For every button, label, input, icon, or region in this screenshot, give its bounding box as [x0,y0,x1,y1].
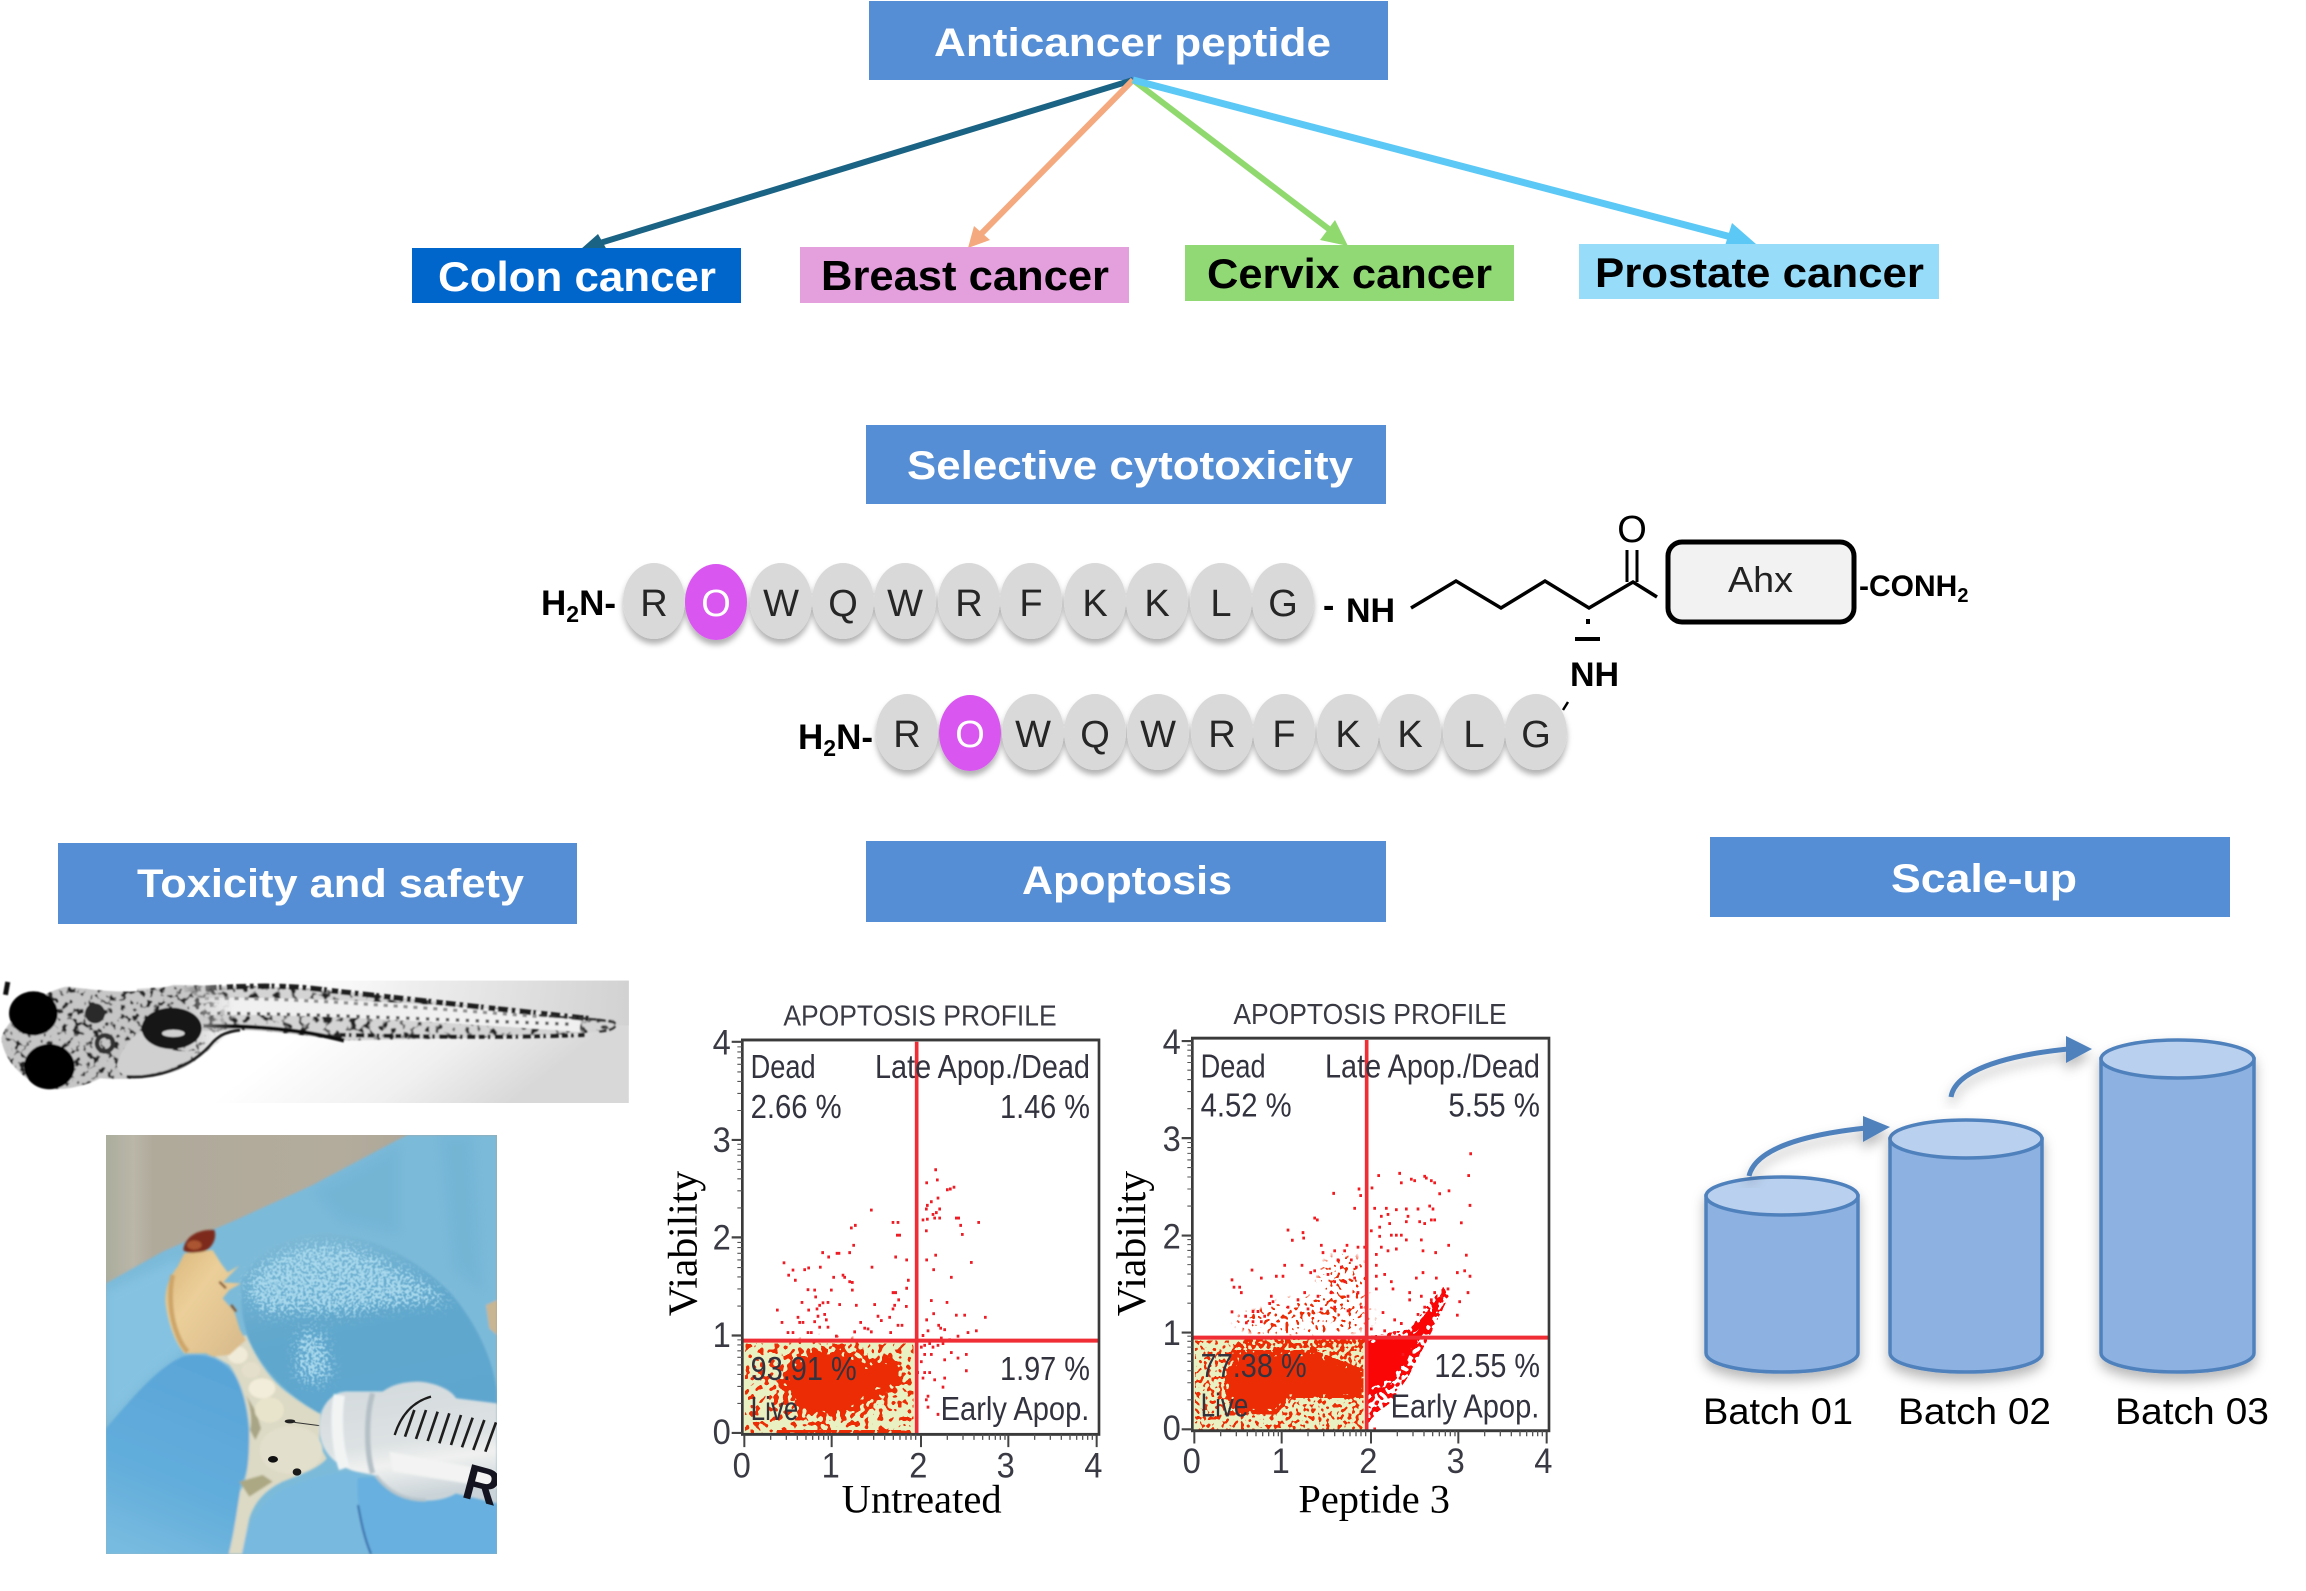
thumb [241,1233,497,1413]
right fingers [241,1472,369,1554]
peptide chain 1: K [1082,583,1108,625]
arrow: batch 02 to batch 03 [1951,1036,2092,1097]
peptide chain 2 [798,694,1567,771]
left finger [106,1355,249,1554]
flow cytometry plot: Peptide 3 [1110,998,1552,1522]
peptide chain 2: H [798,718,823,757]
cylinder: Batch 02: Batch 02 [1898,1391,2051,1432]
y axis numbers: 3 [1163,1120,1181,1159]
header: Toxicity and safety: Toxicity and safety [137,862,525,906]
plot area [1192,1038,1549,1431]
header: Anticancer peptide [869,1,1388,80]
peptide chain 1: F [1019,583,1043,625]
peptide chain 1: R [640,583,668,625]
quadrant labels: 93.91 % [751,1350,857,1387]
y axis title: Viability [661,1170,706,1316]
header: Scale-up: Scale-up [1891,857,2077,901]
peptide chain 1: G [1268,583,1298,625]
image: zebrafish larva [1,981,629,1103]
plot area [742,1040,1099,1434]
cylinder: Batch 03: Batch 03 [2115,1391,2269,1432]
peptide chain 2: Q [1080,714,1110,756]
quadrant lines [1192,1040,1549,1431]
arrow: to cervix cancer [1133,80,1348,246]
x axis numbers [1183,1442,1552,1481]
peptide structure [541,509,1968,771]
syringe [318,1380,497,1506]
y axis numbers: 2 [713,1218,731,1258]
x axis numbers: 3 [997,1446,1015,1486]
y axis numbers: 1 [1163,1314,1181,1353]
peptide chain 2: N- [836,718,873,757]
sparse events [1231,1154,1472,1429]
quadrant labels: Late Apop./Dead [1325,1047,1540,1085]
peptide chain 1: Q [828,583,858,625]
arrow: to colon cancer [581,80,1133,250]
peptide chain 2: G [1521,714,1551,756]
label: CONH2: -CONH [1859,570,1957,603]
larva upper body [165,1250,246,1357]
quadrant labels: 5.55 % [1448,1086,1540,1124]
quadrant labels: 1.97 % [1000,1350,1090,1387]
x axis numbers: 0 [1183,1442,1201,1481]
quadrant labels: Live [1201,1386,1248,1424]
peptide chain 1: L [1210,583,1232,625]
box: Ahx [1668,542,1854,622]
x axis numbers: 3 [1447,1442,1465,1481]
arrow: to breast cancer [968,80,1133,248]
header: Selective cytotoxicity [866,425,1386,504]
linker: NH and carbon chain: - [1323,587,1334,625]
cylinder: Batch 03 [2101,1040,2269,1432]
peptide chain 1: H [541,584,566,623]
peptide chain 2: W [1140,714,1176,756]
y axis numbers: 2 [1163,1217,1181,1257]
peptide chain 2: 2 [823,735,836,761]
peptide chain 1: K [1144,583,1170,625]
sparse events [776,1170,987,1414]
header: Selective cytotoxicity: Selective cytotoxicity [907,444,1354,488]
peptide chain 2: K [1397,714,1423,756]
peptide chain 2: R [1208,714,1236,756]
x axis title: Untreated [842,1478,1002,1522]
glove background [106,1135,497,1554]
quadrant labels: 2.66 % [751,1088,842,1125]
quadrant labels [1201,1047,1540,1425]
box: Cervix cancer: Cervix cancer [1207,250,1492,297]
quadrant labels: Live [751,1390,798,1427]
diagonal dense population [1365,1287,1449,1425]
peptide chain 1: 2 [566,601,579,627]
box: Colon cancer: Colon cancer [438,253,716,300]
box: Prostate cancer: Prostate cancer [1595,249,1924,296]
peptide chain 1: N- [579,584,616,623]
peptide chain 1: R [955,583,983,625]
quadrant labels: 12.55 % [1434,1347,1540,1384]
linker: NH and carbon chain: NH [1570,656,1619,694]
peptide chain 1: W [763,583,799,625]
dense event cloud [1195,1249,1380,1430]
x axis numbers: 2 [909,1446,927,1486]
header: Anticancer peptide: Anticancer peptide [934,21,1331,65]
x axis numbers: 1 [1272,1442,1290,1481]
linker: NH and carbon chain: O [1617,509,1647,551]
arrow: to prostate cancer [1133,80,1756,249]
plot title: APOPTOSIS PROFILE [783,999,1057,1032]
image: larva injection photo [106,1135,507,1554]
box: Colon cancer [412,248,741,303]
fish head [1,985,240,1089]
peptide chain 1: W [887,583,923,625]
peptide chain 2: O [955,714,985,756]
flow cytometry plot: Untreated [661,999,1102,1522]
peptide chain 2: K [1335,714,1361,756]
peptide chain 1: O [701,583,731,625]
x axis title: Peptide 3 [1298,1478,1450,1522]
quadrant labels: 77.38 % [1201,1347,1307,1384]
dense event cloud [745,1333,913,1434]
glove texture highlights [246,1244,453,1385]
x axis numbers: 4 [1084,1446,1102,1486]
y axis numbers: 4 [1163,1023,1181,1062]
box: Ahx: Ahx [1728,559,1793,600]
linker: NH and carbon chain: NH [1346,592,1395,630]
arrow: batch 01 to batch 02 [1749,1116,1890,1176]
linker: NH and carbon chain [1323,509,1657,710]
y axis numbers: 0 [1163,1409,1181,1448]
header: Apoptosis: Apoptosis [1022,859,1232,903]
x axis numbers: 4 [1534,1442,1552,1481]
x axis numbers: 1 [822,1446,840,1486]
quadrant labels: Late Apop./Dead [875,1048,1090,1085]
header: Apoptosis [866,841,1386,922]
quadrant labels: 1.46 % [1000,1088,1090,1125]
header: Toxicity and safety [58,843,577,924]
peptide chain 2: F [1272,714,1296,756]
larva head [183,1230,215,1253]
larva lower body [206,1335,327,1554]
plot frame and ticks [732,1040,1099,1447]
box: Breast cancer: Breast cancer [821,252,1109,299]
cylinder: Batch 02 [1890,1120,2051,1432]
y axis numbers [1163,1023,1181,1448]
peptide chain 1 [541,563,1314,640]
x axis numbers: 2 [1359,1442,1377,1481]
syringe: R [457,1453,507,1517]
quadrant labels [751,1048,1090,1427]
plot title: APOPTOSIS PROFILE [1233,998,1507,1030]
quadrant lines [742,1042,1099,1434]
peptide chain 2: L [1463,714,1485,756]
quadrant labels: 4.52 % [1201,1086,1292,1124]
live quadrant fill [742,1341,915,1434]
live quadrant fill [1192,1338,1365,1431]
quadrant labels: Early Apop. [941,1390,1089,1427]
fish background and tail [1,981,629,1103]
y axis numbers: 3 [713,1121,731,1160]
x axis numbers [733,1446,1102,1486]
label: CONH2: 2 [1957,585,1968,607]
cylinder: Batch 01 [1703,1177,1858,1432]
header: Scale-up [1710,837,2230,917]
peptide chain 2: W [1015,714,1051,756]
larva spots [268,1419,319,1476]
quadrant labels: Early Apop. [1391,1387,1539,1425]
y axis numbers: 4 [713,1023,731,1063]
x axis numbers: 0 [733,1446,751,1486]
y axis numbers: 1 [713,1316,731,1355]
quadrant labels: Dead [1201,1047,1266,1085]
cylinder: Batch 01: Batch 01 [1703,1391,1853,1432]
peptide chain 2: R [893,714,921,756]
plot frame and ticks [1182,1038,1549,1443]
quadrant labels: Dead [751,1048,816,1085]
y axis numbers: 0 [713,1413,731,1453]
y axis title: Viability [1110,1170,1155,1316]
y axis numbers [713,1023,731,1453]
